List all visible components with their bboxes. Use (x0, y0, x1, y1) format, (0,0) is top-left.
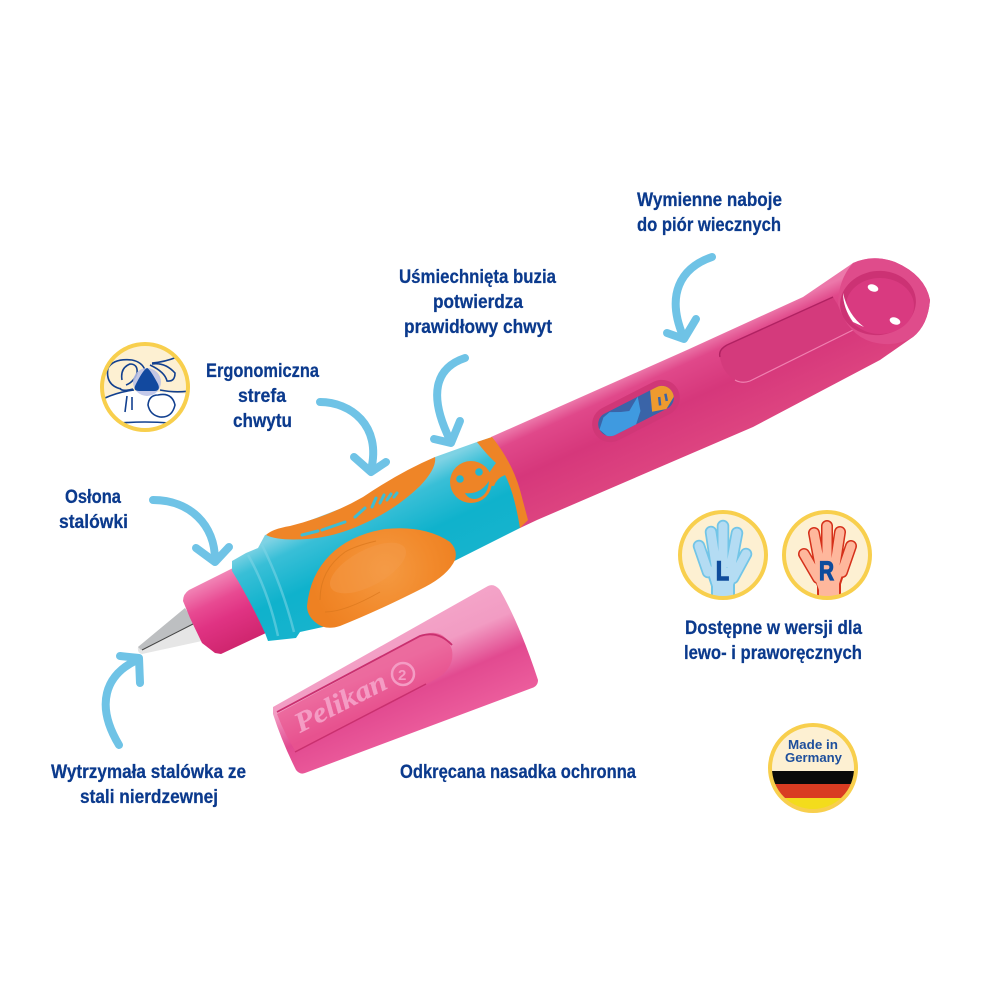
label: nib (51, 762, 246, 808)
label: grip: Ergonomiczna (206, 361, 319, 382)
pen barrel (491, 258, 930, 528)
fountain pen (138, 258, 930, 654)
icon: left hand badge (679, 511, 767, 600)
icon: made in Germany badge (769, 724, 857, 812)
nib (138, 608, 202, 654)
label: nib guard: stalówki (59, 512, 128, 533)
arrow: nib (106, 656, 140, 745)
cap logo: 2 (398, 667, 406, 684)
barrel label recess (720, 297, 853, 382)
label: left and right handed: lewo- i praworęcznych (684, 643, 862, 664)
label: nib: stali nierdzewnej (80, 787, 218, 808)
icon: left hand badge: L (716, 556, 729, 586)
icon: right hand badge (783, 511, 871, 600)
arrow: nib guard (153, 500, 229, 562)
nib guard (183, 567, 266, 654)
label: smile: potwierdza (433, 292, 523, 313)
label: grip (206, 361, 319, 432)
label: left and right handed: Dostępne w wersji dla (685, 618, 862, 639)
label: left and right handed (684, 618, 862, 664)
cap logo (288, 663, 414, 740)
pen cap (273, 585, 538, 774)
thumb rest (307, 528, 456, 628)
grip section (232, 437, 528, 641)
label: cap: Odkręcana nasadka ochronna (400, 762, 636, 783)
label: cartridges: Wymienne naboje (637, 190, 782, 211)
icon: grip badge (100, 343, 190, 435)
arrow: cartridges (667, 257, 712, 339)
icon: made in Germany badge: Germany (785, 750, 843, 765)
label: cartridges (637, 190, 782, 236)
cartridge head (836, 258, 930, 344)
orange band (477, 437, 528, 528)
label: smile: Uśmiechnięta buzia (399, 267, 556, 288)
label: nib guard: Osłona (65, 487, 121, 508)
label: nib guard (59, 487, 128, 533)
cap logo: Pelikan (288, 666, 392, 740)
arrow: smile (434, 358, 465, 443)
label: smile (399, 267, 556, 338)
icon: right hand badge: R (819, 556, 834, 586)
label: grip: strefa (238, 386, 286, 407)
label: smile: prawidłowy chwyt (404, 317, 553, 338)
upper finger rest (266, 457, 435, 540)
ink window (592, 380, 680, 436)
label: nib: Wytrzymała stalówka ze (51, 762, 246, 783)
smiley (450, 461, 492, 503)
icon: made in Germany badge: Made in (788, 737, 838, 752)
grip ribs (248, 545, 294, 636)
label: grip: chwytu (233, 411, 292, 432)
arrow: grip (320, 402, 386, 472)
label: cartridges: do piór wiecznych (637, 215, 781, 236)
